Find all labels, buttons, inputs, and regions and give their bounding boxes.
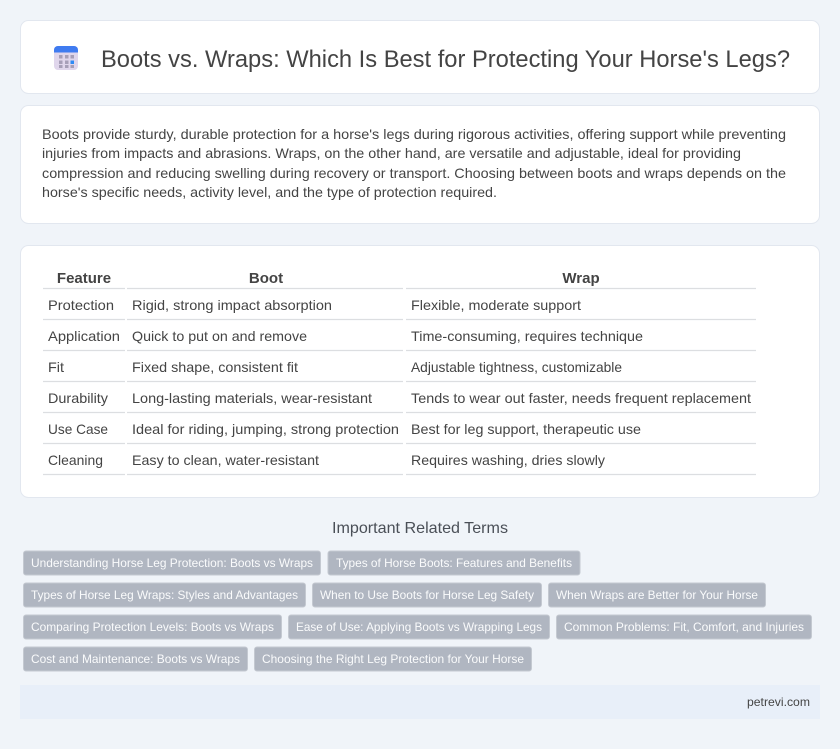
row: fit: Fixed shape, consistent fit — [132, 359, 298, 375]
table header: Boot — [249, 270, 283, 287]
tag — [24, 551, 320, 575]
row: use case: Use Case — [48, 421, 108, 437]
header panel — [20, 20, 820, 94]
tag: Types of Horse Boots: Features and Benefits — [336, 556, 572, 570]
tag — [328, 551, 580, 575]
panel: summary paragraph: Boots provide sturdy, durable protection for a horse's legs during rigorous activities, offering support while preventing — [42, 126, 786, 142]
row: use case: Best for leg support, therapeutic use — [411, 421, 641, 437]
row: durability: Long-lasting materials, wear-resistant — [132, 390, 372, 406]
row: protection — [48, 297, 581, 313]
footer bar: petrevi.com — [747, 695, 810, 709]
table header — [57, 270, 600, 287]
tag — [24, 583, 306, 607]
tag: Comparing Protection Levels: Boots vs Wraps — [31, 620, 274, 634]
row: protection: Flexible, moderate support — [411, 297, 581, 313]
heading: related terms: Important Related Terms — [332, 520, 508, 537]
row: durability — [48, 390, 751, 406]
row: fit: Fit — [48, 359, 64, 375]
title: Boots vs. Wraps: Which Is Best for Protecting Your Horse's Legs? — [101, 46, 790, 73]
tag — [254, 647, 532, 671]
tag: Choosing the Right Leg Protection for Your Horse — [262, 652, 524, 666]
tag: Cost and Maintenance: Boots vs Wraps — [31, 652, 240, 666]
row: use case — [48, 421, 641, 437]
row: fit — [48, 359, 622, 375]
table header: Feature — [57, 270, 111, 287]
tag: When Wraps are Better for Your Horse — [556, 588, 758, 602]
row: application: Quick to put on and remove — [132, 328, 307, 344]
tag: Types of Horse Leg Wraps: Styles and Advantages — [31, 588, 298, 602]
row: cleaning: Easy to clean, water-resistant — [132, 452, 319, 468]
tag — [548, 583, 766, 607]
panel: summary paragraph: injuries from impacts and abrasions. Wraps, on the other hand, are versatile and adjustable, ideal for providing — [42, 145, 741, 161]
tag: Understanding Horse Leg Protection: Boots vs Wraps — [31, 556, 313, 570]
tag — [288, 615, 550, 639]
panel: summary paragraph — [20, 106, 820, 224]
tag — [24, 615, 282, 639]
row: use case: Ideal for riding, jumping, strong protection — [132, 421, 399, 437]
panel: summary paragraph: compression and reducing swelling during recovery or transport. Choosing between boots and wraps depends on the — [42, 165, 786, 181]
panel: comparison table — [20, 246, 820, 498]
row: application — [48, 328, 643, 344]
panel: summary paragraph: horse's specific needs, activity level, and the type of protection required. — [42, 184, 497, 200]
row: protection: Protection — [48, 297, 114, 313]
row: fit: Adjustable tightness, customizable — [411, 359, 622, 375]
row: application: Application — [48, 328, 120, 344]
tag — [312, 583, 542, 607]
row: protection: Rigid, strong impact absorption — [132, 297, 332, 313]
footer bar — [20, 685, 820, 719]
icon: calendar — [54, 46, 78, 70]
row: cleaning: Cleaning — [48, 452, 103, 468]
tag: Ease of Use: Applying Boots vs Wrapping Legs — [296, 620, 542, 634]
table header: Wrap — [562, 270, 600, 287]
related term tags — [24, 551, 812, 671]
tag — [24, 647, 248, 671]
row: cleaning: Requires washing, dries slowly — [411, 452, 605, 468]
row: durability: Tends to wear out faster, needs frequent replacement — [411, 390, 751, 406]
row: application: Time-consuming, requires technique — [411, 328, 643, 344]
row: durability: Durability — [48, 390, 108, 406]
row: cleaning — [48, 452, 605, 468]
tag: When to Use Boots for Horse Leg Safety — [320, 588, 534, 602]
tag: Common Problems: Fit, Comfort, and Injuries — [564, 620, 804, 634]
tag — [556, 615, 812, 639]
